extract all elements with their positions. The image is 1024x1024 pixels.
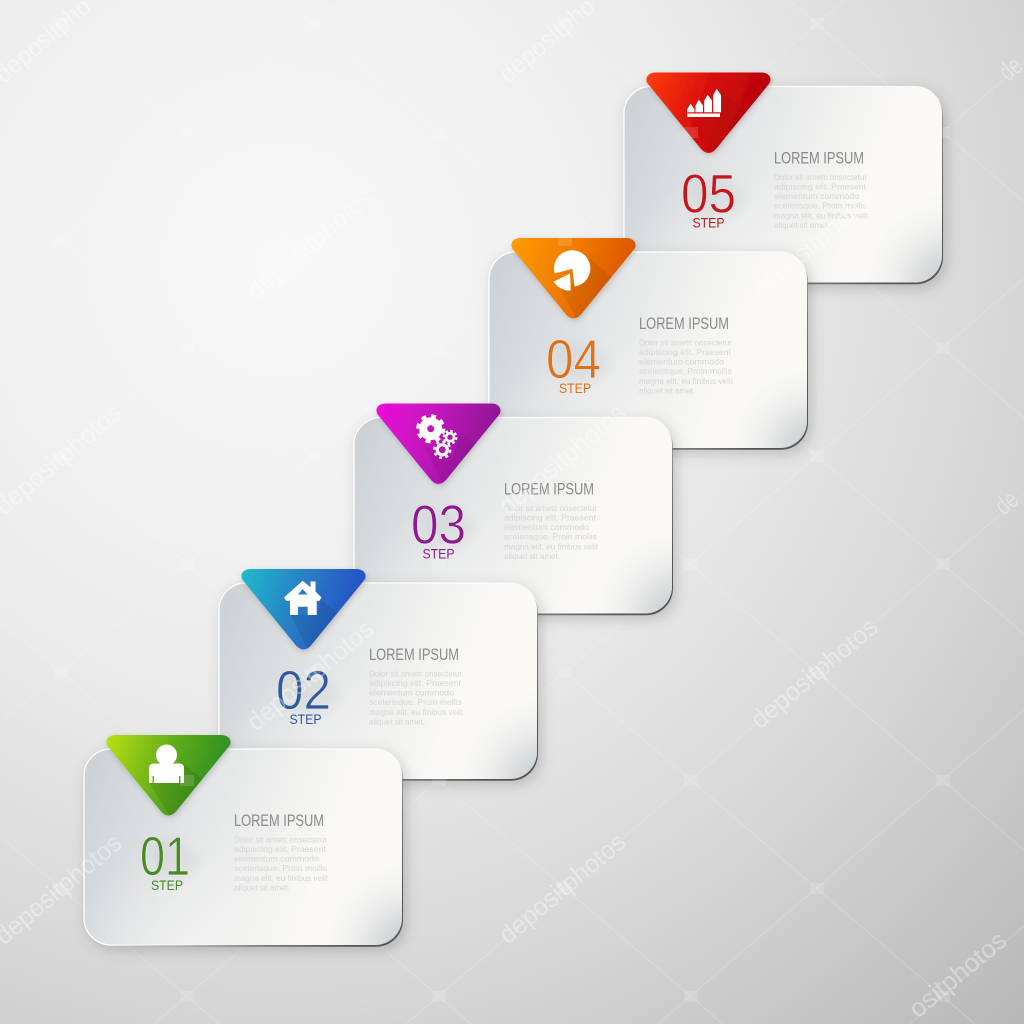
step number: 04 bbox=[546, 328, 601, 390]
body text: elementum commodo bbox=[234, 854, 319, 864]
triangle badge bbox=[106, 734, 234, 820]
body text: elementum commodo bbox=[369, 688, 454, 698]
icon: gears bbox=[418, 416, 456, 458]
body text bbox=[774, 172, 869, 230]
body text: scelerisque. Proin mollis bbox=[504, 532, 597, 542]
body text: elementum commodo bbox=[504, 522, 589, 532]
triangle badge bbox=[646, 72, 774, 157]
watermark text: depositphotos bbox=[745, 181, 883, 305]
body text bbox=[234, 834, 329, 892]
body text: scelerisque. Proin mollis bbox=[369, 697, 462, 707]
body text: scelerisque. Proin mollis bbox=[234, 863, 327, 873]
heading: LOREM IPSUM bbox=[234, 811, 324, 830]
panel: card 1 bbox=[84, 749, 403, 947]
step label: STEP bbox=[559, 380, 591, 396]
heading: LOREM IPSUM bbox=[369, 645, 459, 664]
watermark text: ositphotos bbox=[903, 925, 1012, 1024]
icon: person bbox=[149, 744, 184, 783]
body text: adipiscing elit. Praesent bbox=[234, 844, 327, 854]
card 3 bbox=[354, 404, 673, 615]
body text: adipiscing elit. Praesent bbox=[774, 182, 867, 192]
watermark text: depositphotos bbox=[241, 613, 379, 737]
card 1 bbox=[84, 735, 403, 947]
panel: card 4 bbox=[489, 252, 808, 450]
icon: house bbox=[284, 581, 322, 615]
card 5 bbox=[624, 72, 943, 284]
heading: LOREM IPSUM bbox=[639, 314, 729, 333]
card 2 bbox=[219, 569, 538, 781]
watermark text: depositphotos bbox=[493, 826, 631, 950]
body text: aliquet sit amet. bbox=[774, 220, 830, 230]
watermark text: depositphotos bbox=[745, 611, 883, 735]
body text: aliquet sit amet. bbox=[639, 385, 695, 395]
card 4 bbox=[489, 238, 808, 450]
body text: magna elit, eu finibus velit bbox=[369, 707, 464, 717]
body text: aliquet sit amet. bbox=[504, 551, 560, 561]
body text: magna elit, eu finibus velit bbox=[774, 210, 869, 220]
step label: STEP bbox=[290, 711, 322, 727]
step number: 05 bbox=[681, 162, 736, 224]
body text: adipiscing elit. Praesent bbox=[639, 347, 732, 357]
triangle badge bbox=[510, 238, 638, 322]
icon: rising bar chart bbox=[687, 89, 721, 117]
body text bbox=[369, 668, 464, 726]
body text: magna elit, eu finibus velit bbox=[504, 541, 599, 551]
body text: elementum commodo bbox=[774, 191, 859, 201]
panel: card 3 bbox=[354, 418, 673, 615]
body text: aliquet sit amet. bbox=[369, 716, 425, 726]
watermark text: depositphotos bbox=[493, 397, 631, 521]
panel: card 5 bbox=[624, 86, 943, 284]
body text: Dolor sit ametc onsectetur bbox=[504, 503, 597, 513]
step label: STEP bbox=[692, 214, 724, 230]
body text: adipiscing elit. Praesent bbox=[504, 512, 597, 522]
body text: Dolor sit ametc onsectetur bbox=[369, 668, 462, 678]
body text: Dolor sit ametc onsectetur bbox=[774, 172, 867, 182]
body text bbox=[504, 503, 599, 561]
icon: pie chart bbox=[554, 250, 590, 291]
step number: 02 bbox=[276, 659, 331, 721]
body text: elementum commodo bbox=[639, 357, 724, 367]
step label: STEP bbox=[151, 877, 183, 893]
step number: 03 bbox=[411, 494, 466, 556]
body text: adipiscing elit. Praesent bbox=[369, 678, 462, 688]
body text: scelerisque. Proin mollis bbox=[639, 366, 732, 376]
body text: magna elit, eu finibus velit bbox=[234, 873, 329, 883]
watermark text: depositphotos bbox=[241, 181, 379, 305]
body text: magna elit, eu finibus velit bbox=[639, 376, 734, 386]
panel: card 2 bbox=[219, 583, 538, 781]
body text: Dolor sit ametc onsectetur bbox=[234, 834, 327, 844]
heading: LOREM IPSUM bbox=[504, 480, 594, 498]
body text bbox=[639, 338, 734, 395]
heading: LOREM IPSUM bbox=[774, 148, 864, 168]
triangle badge bbox=[376, 403, 504, 488]
step number: 01 bbox=[140, 825, 190, 887]
body text: aliquet sit amet. bbox=[234, 882, 290, 892]
triangle badge bbox=[240, 568, 368, 654]
step label: STEP bbox=[422, 546, 454, 562]
body text: scelerisque. Proin mollis bbox=[774, 201, 867, 211]
body text: Dolor sit ametc onsectetur bbox=[639, 338, 732, 348]
